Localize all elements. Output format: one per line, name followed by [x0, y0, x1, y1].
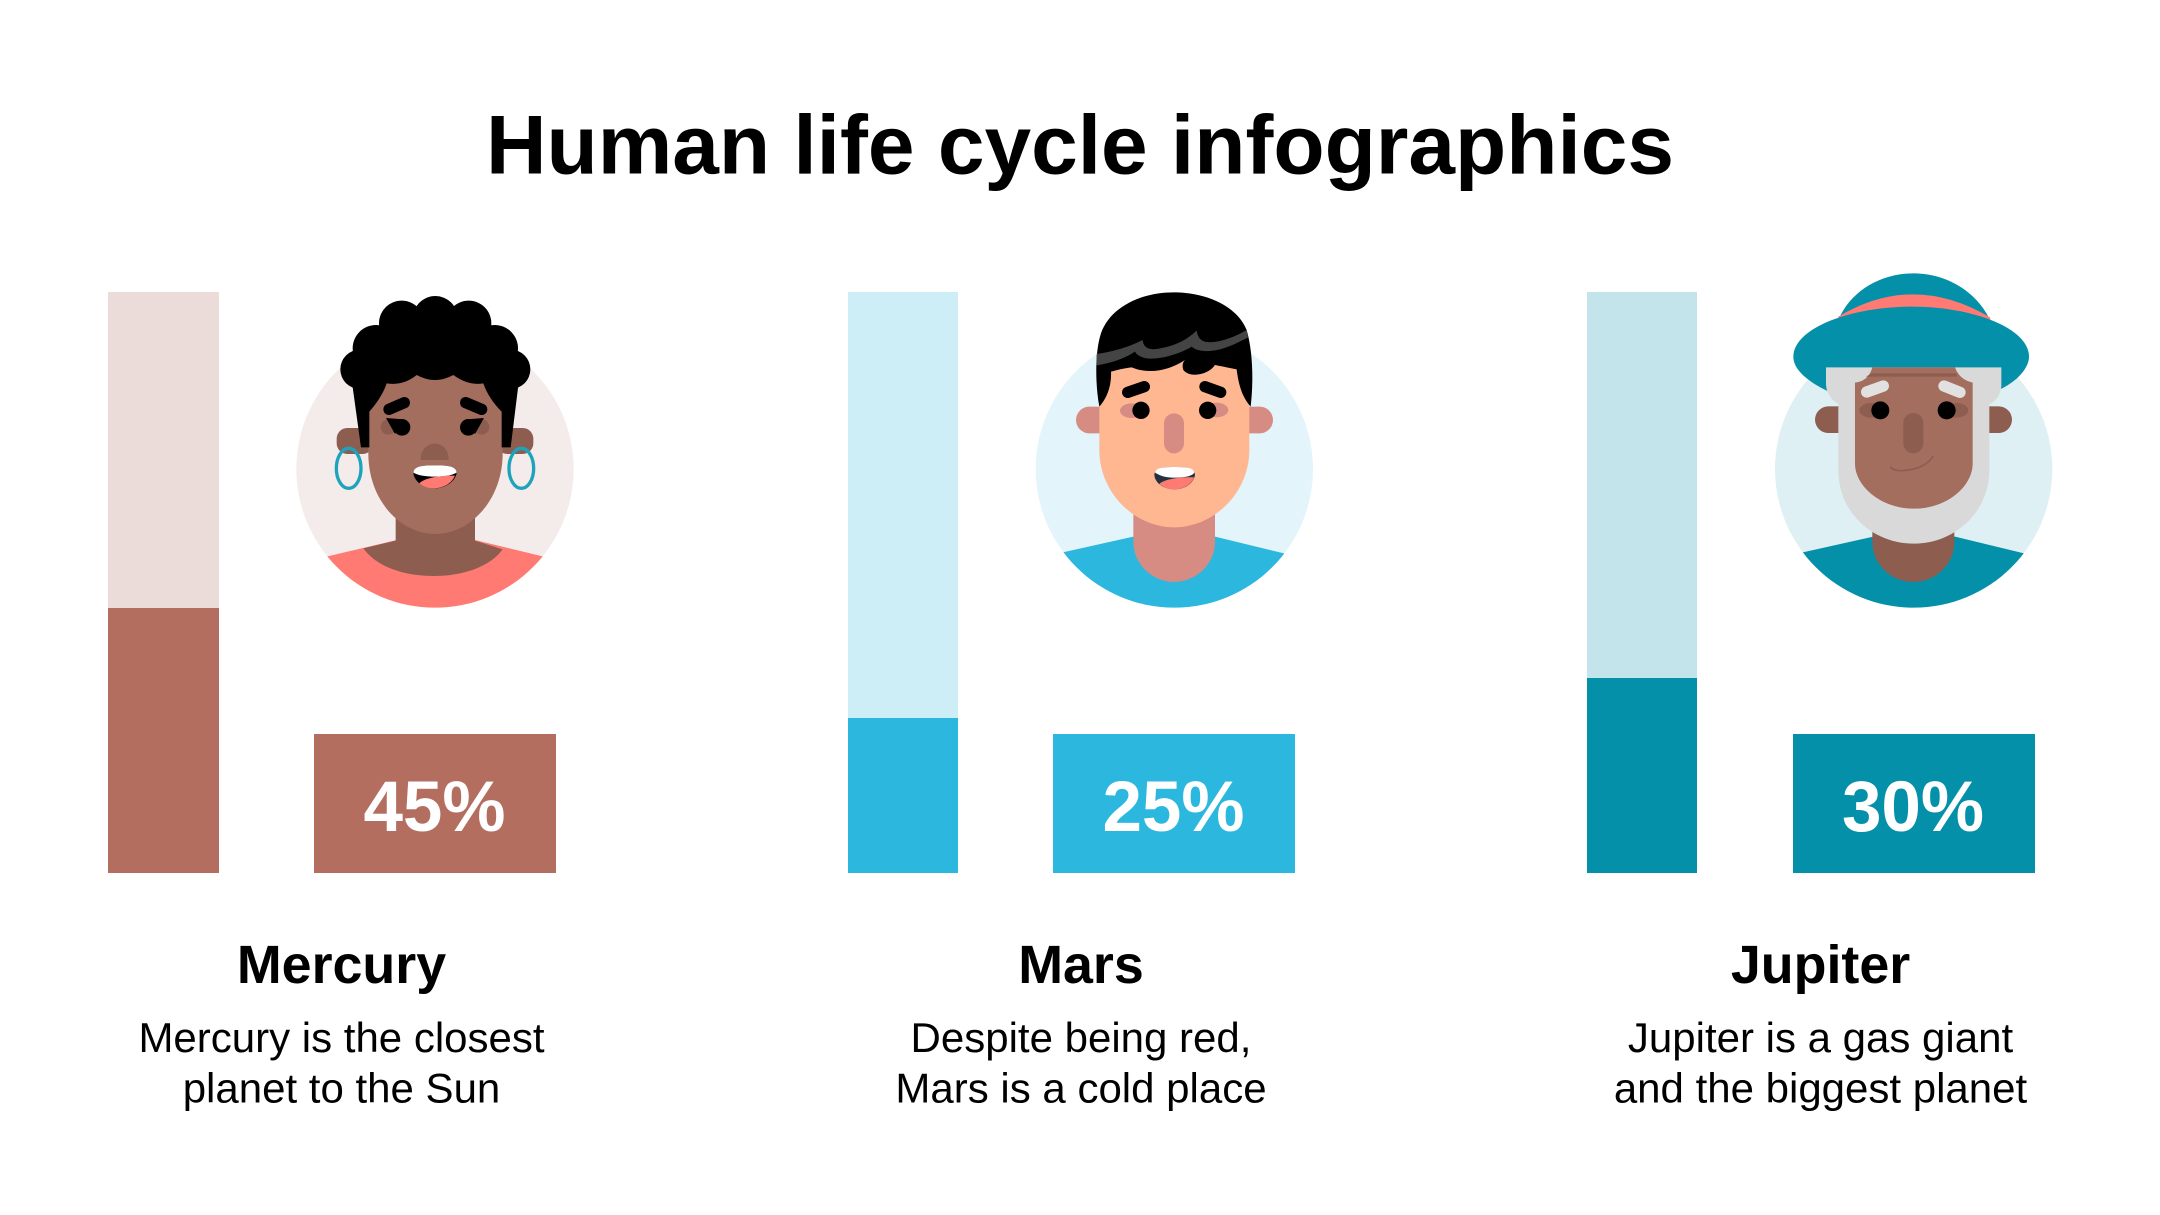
- percentage badge: 25%: [1053, 734, 1295, 873]
- percentage badge: 45%: 45%: [363, 768, 506, 847]
- bar chart: Mercury 45%: [108, 292, 219, 873]
- avatar: elderly man with teal hat: [1775, 273, 2052, 613]
- panel: Mercury: [108, 292, 574, 1112]
- text: Mercury description: planet to the Sun: [183, 1064, 500, 1112]
- percentage badge: 25%: 25%: [1102, 768, 1245, 847]
- text: Mars description: Despite being red,: [911, 1014, 1251, 1061]
- text: Jupiter description: Jupiter is a gas giant: [1628, 1014, 2013, 1061]
- bar chart: Mars 25%: [848, 292, 958, 873]
- heading: Jupiter: Jupiter: [1731, 935, 1910, 995]
- heading: Mercury: Mercury: [237, 935, 446, 995]
- avatar: woman with curly black hair: [296, 296, 574, 613]
- text: Jupiter description: and the biggest planet: [1614, 1064, 2027, 1112]
- percentage badge: 45%: [314, 734, 556, 873]
- title: Human life cycle infographics: [486, 97, 1674, 191]
- text: Mercury description: Mercury is the closest: [138, 1014, 545, 1061]
- bar chart: Jupiter 30%: [1587, 292, 1697, 873]
- heading: Mars: Mars: [1018, 935, 1144, 995]
- percentage badge: 30%: [1793, 734, 2035, 873]
- percentage badge: 30%: 30%: [1842, 768, 1984, 847]
- panel: Jupiter: [1587, 273, 2052, 1112]
- text: Mars description: Mars is a cold place: [895, 1064, 1267, 1112]
- avatar: young man with black hair: [1036, 292, 1313, 613]
- panel: Mars: [848, 292, 1313, 1112]
